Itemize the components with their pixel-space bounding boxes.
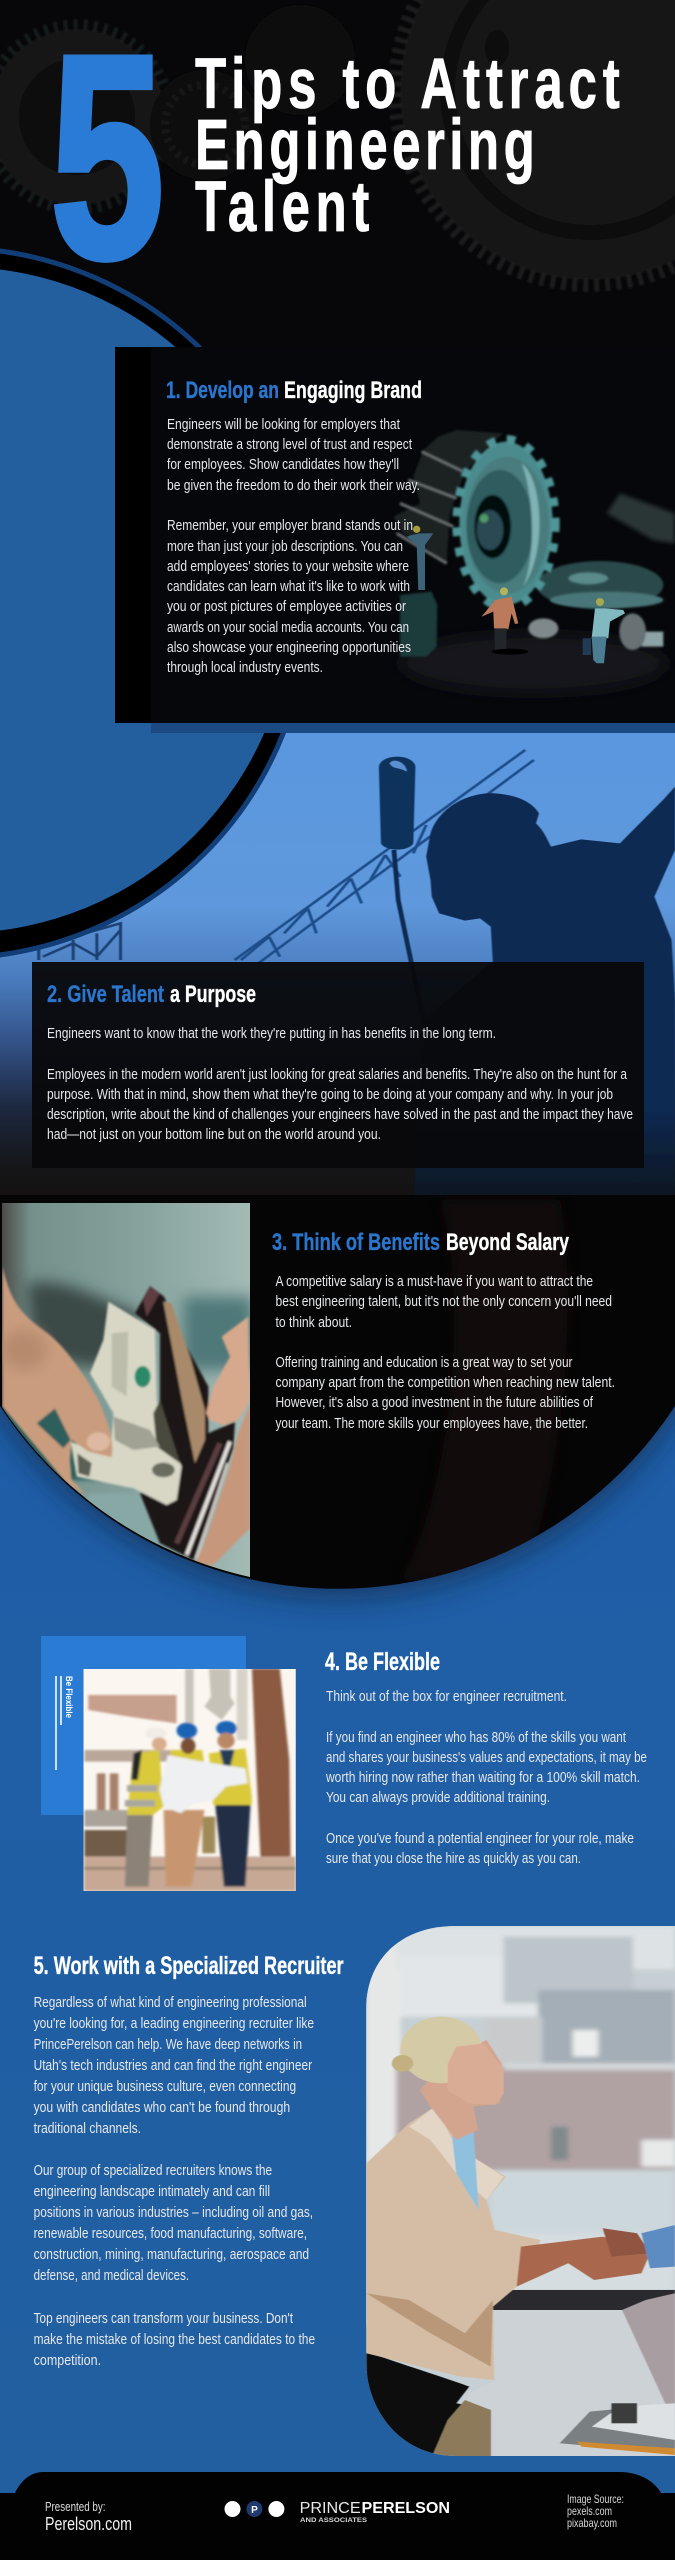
body text 2	[47, 1026, 633, 1143]
body text 3	[276, 1274, 615, 1432]
section 2 photo: crane and silhouette	[0, 723, 675, 1213]
hex nut	[528, 618, 558, 638]
body text 1: awards on your social media accounts. You can	[167, 620, 409, 636]
arm and handshake	[517, 2237, 650, 2287]
title: heading text: Tips to Attract	[195, 45, 620, 124]
image sources: Image Source:	[567, 2492, 624, 2506]
wallet	[0, 1267, 250, 1565]
right hand	[206, 1317, 250, 1425]
photo: hands and wallet	[0, 1200, 260, 1580]
body text 5: you with candidates who can't be found through	[34, 2100, 290, 2116]
body text 3: Offering training and education is a great way to set your	[276, 1355, 573, 1371]
body text 1: also showcase your engineering opportunities	[167, 640, 411, 656]
body text 5: Utah's tech industries and can find the right engineer	[34, 2058, 312, 2074]
right person	[209, 1748, 252, 1805]
body text 5: Top engineers can transform your business. Don't	[34, 2311, 293, 2327]
body text 3: company apart from the competition when reaching new talent.	[276, 1375, 615, 1391]
body text 4: Think out of the box for engineer recruitment.	[326, 1689, 567, 1705]
logo: PrincePerelson: PRINCE	[300, 2500, 361, 2517]
silhouette of worker	[413, 787, 675, 1213]
body text 5: Regardless of what kind of engineering professional	[34, 1995, 307, 2011]
shirt	[452, 2130, 479, 2210]
panel 2: give talent a purpose	[32, 962, 644, 1168]
heading 1	[166, 377, 422, 404]
heading 2: 2. Give Talent	[47, 981, 164, 1008]
clipboard	[559, 2410, 675, 2448]
body text 5: traditional channels.	[34, 2121, 141, 2137]
bills	[71, 1302, 182, 1505]
body text 1: candidates can learn what it's like to work with	[167, 579, 410, 595]
body text 1: for employees. Show candidates how they'll	[167, 457, 399, 473]
panel 3: dark arc section	[0, 1195, 675, 1589]
lamp and cable	[379, 757, 415, 850]
body text 5: construction, mining, manufacturing, aerospace and	[34, 2247, 309, 2263]
vertical label: Be Flexible	[55, 1676, 74, 1770]
stripes	[187, 1442, 230, 1555]
heading 1: Engaging Brand	[284, 377, 422, 404]
body text 5: PrincePerelson can help. We have deep networks in	[34, 2037, 302, 2053]
logo: PrincePerelson: P	[251, 2505, 258, 2516]
center worker	[482, 587, 528, 655]
body text 5: make the mistake of losing the best candidates to the	[34, 2332, 315, 2348]
body text 1: demonstrate a strong level of trust and respect	[167, 437, 412, 453]
logo: PrincePerelson	[224, 2500, 450, 2524]
image sources: pexels.com	[567, 2504, 612, 2518]
page background	[0, 0, 675, 1210]
blue lower background	[0, 1400, 675, 2560]
heading 5: 5. Work with a Specialized Recruiter	[34, 1952, 344, 1980]
body text 5: for your unique business culture, even connecting	[34, 2079, 296, 2095]
section 4: be flexible	[41, 1636, 647, 1891]
body text 4: You can always provide additional training.	[326, 1790, 550, 1806]
body text 4	[325, 1689, 647, 1867]
blue accent box	[41, 1636, 246, 1815]
background: faint gears	[0, 0, 675, 285]
body text 1: you or post pictures of employee activities or	[167, 599, 406, 615]
title: big number 5: 5	[50, 0, 165, 319]
body text 3: to think about.	[276, 1315, 352, 1331]
blueprint paper	[159, 1755, 248, 1813]
section 5: work with a specialized recruiter	[34, 1926, 675, 2460]
body text 5: defense, and medical devices.	[34, 2268, 189, 2284]
laptop	[622, 2293, 675, 2410]
blue circle with dark ring	[0, 248, 308, 958]
body text 5: Our group of specialized recruiters knows the	[34, 2163, 272, 2179]
bolt	[619, 613, 663, 650]
photo: miniature workers and gear	[393, 430, 675, 693]
body text 1	[167, 417, 420, 676]
body text 5: you're looking for, a leading engineering recruiter like	[34, 2016, 314, 2032]
nut and figure on the left	[400, 592, 437, 657]
body text 1: through local industry events.	[167, 660, 323, 676]
logo: PrincePerelson: AND ASSOCIATES	[300, 2517, 368, 2524]
heading 1: 1. Develop an	[166, 377, 279, 404]
heading 2: a Purpose	[170, 981, 256, 1008]
shadow under dark arc	[0, 1406, 675, 1615]
crane lattice	[39, 750, 534, 963]
heading 3: 3. Think of Benefits	[272, 1229, 440, 1256]
body text 1: Engineers will be looking for employers that	[167, 417, 400, 433]
body text 4: sure that you close the hire as quickly as you can.	[326, 1851, 581, 1867]
body text 1: Remember, your employer brand stands out in	[167, 518, 413, 534]
left hand	[3, 1267, 112, 1496]
body text 3: A competitive salary is a must-have if you want to attract the	[276, 1274, 593, 1290]
image sources	[567, 2492, 624, 2530]
body text 1: more than just your job descriptions. You can	[167, 539, 403, 555]
presented by: Perelson.com	[45, 2514, 132, 2534]
body text 3: best engineering talent, but it's not the only concern you'll need	[276, 1294, 612, 1310]
body text 3: your team. The more skills your employees have, the better.	[276, 1416, 588, 1432]
title: heading text: Talent	[195, 168, 369, 247]
gear	[457, 439, 555, 607]
sleeve	[641, 2225, 675, 2268]
title: heading text: Engineering	[195, 106, 535, 185]
heading 4: 4. Be Flexible	[325, 1648, 440, 1676]
panel 1: develop an engaging brand	[115, 347, 675, 733]
footer	[0, 2472, 675, 2560]
jacket	[366, 2107, 540, 2380]
vertical label: Be Flexible: Be Flexible	[64, 1676, 74, 1718]
body text 2: Engineers want to know that the work they're putting in has benefits in the long term.	[47, 1026, 496, 1042]
heading 3: Beyond Salary	[446, 1229, 569, 1256]
presented by: Presented by:	[45, 2500, 106, 2514]
body text 5: engineering landscape intimately and can fill	[34, 2184, 270, 2200]
body text 2: had—not just on your bottom line but on the world around you.	[47, 1127, 381, 1143]
lower dark clothes and wood	[366, 2352, 491, 2460]
left person	[127, 1750, 164, 1817]
photo: handshake in office	[366, 1926, 675, 2460]
body text 3: However, it's also a good investment in the future abilities of	[276, 1395, 594, 1411]
logo: PrincePerelson: PERELSON	[362, 2500, 450, 2517]
body text 5: renewable resources, food manufacturing, software,	[34, 2226, 307, 2242]
body text 1: add employees' stories to your website where	[167, 559, 409, 575]
photo: three engineers with blueprint	[84, 1669, 296, 1891]
middle person	[170, 1750, 204, 1767]
body text 5	[34, 1995, 315, 2369]
body text 5: competition.	[34, 2353, 101, 2369]
presented by	[45, 2500, 132, 2534]
table	[466, 2310, 638, 2456]
right worker	[583, 598, 625, 663]
title: heading text	[195, 45, 620, 247]
body text 1: be given the freedom to do their work their way.	[167, 478, 420, 494]
image sources: pixabay.com	[567, 2516, 617, 2530]
body text 5: positions in various industries – including oil and gas,	[34, 2205, 313, 2221]
head and hair	[420, 2040, 504, 2140]
